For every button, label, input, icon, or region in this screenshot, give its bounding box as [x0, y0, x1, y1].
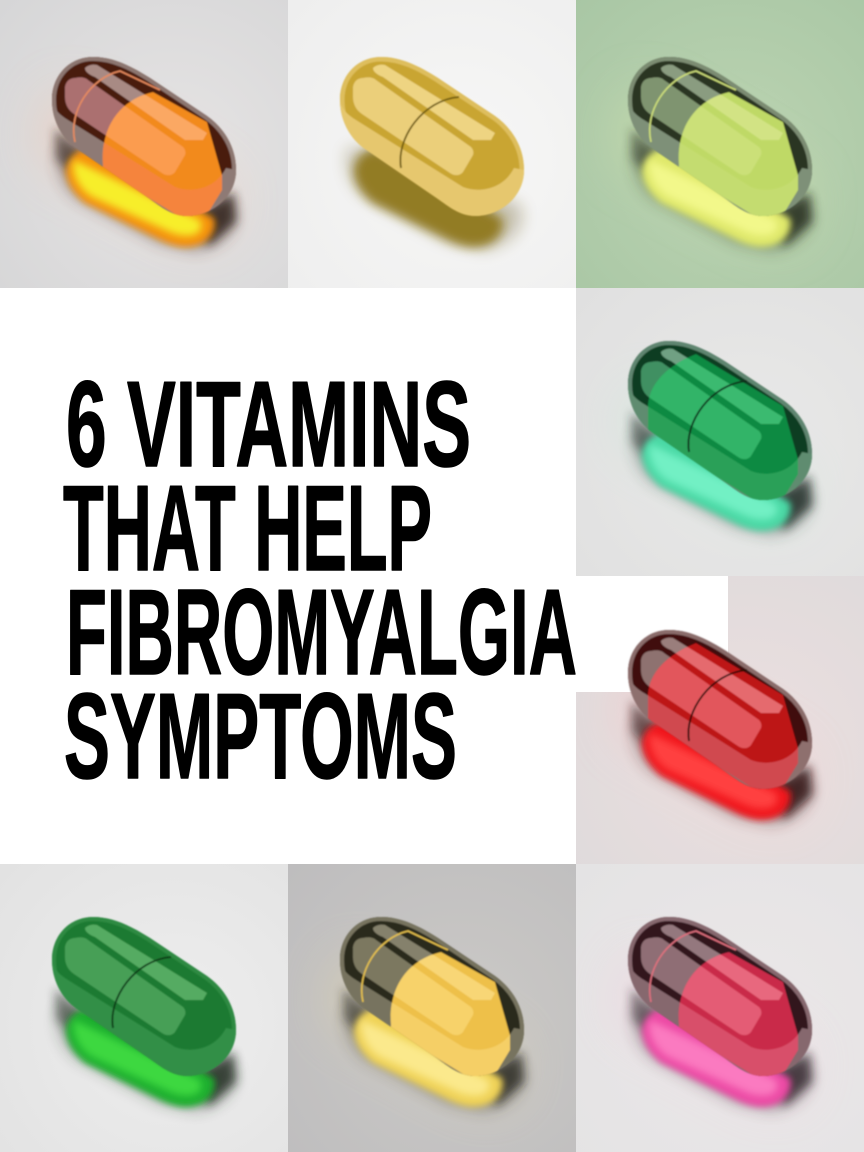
tile: crimson pink capsule: [576, 864, 864, 1152]
title: [63, 356, 577, 804]
title: SYMPTOMS: [64, 668, 457, 804]
tile: lime green capsule: [576, 0, 864, 288]
tile: forest green capsule: [0, 864, 288, 1152]
tile: red capsule: [576, 576, 864, 864]
tile: emerald green capsule: [576, 288, 864, 576]
tile: pale yellow capsule: [288, 864, 576, 1152]
title: 6 VITAMINS: [66, 356, 471, 492]
white notch behind title: [576, 576, 728, 692]
tile: orange capsule: [0, 0, 288, 288]
tile: golden yellow capsule: [288, 0, 576, 288]
title: THAT HELP: [63, 460, 432, 596]
